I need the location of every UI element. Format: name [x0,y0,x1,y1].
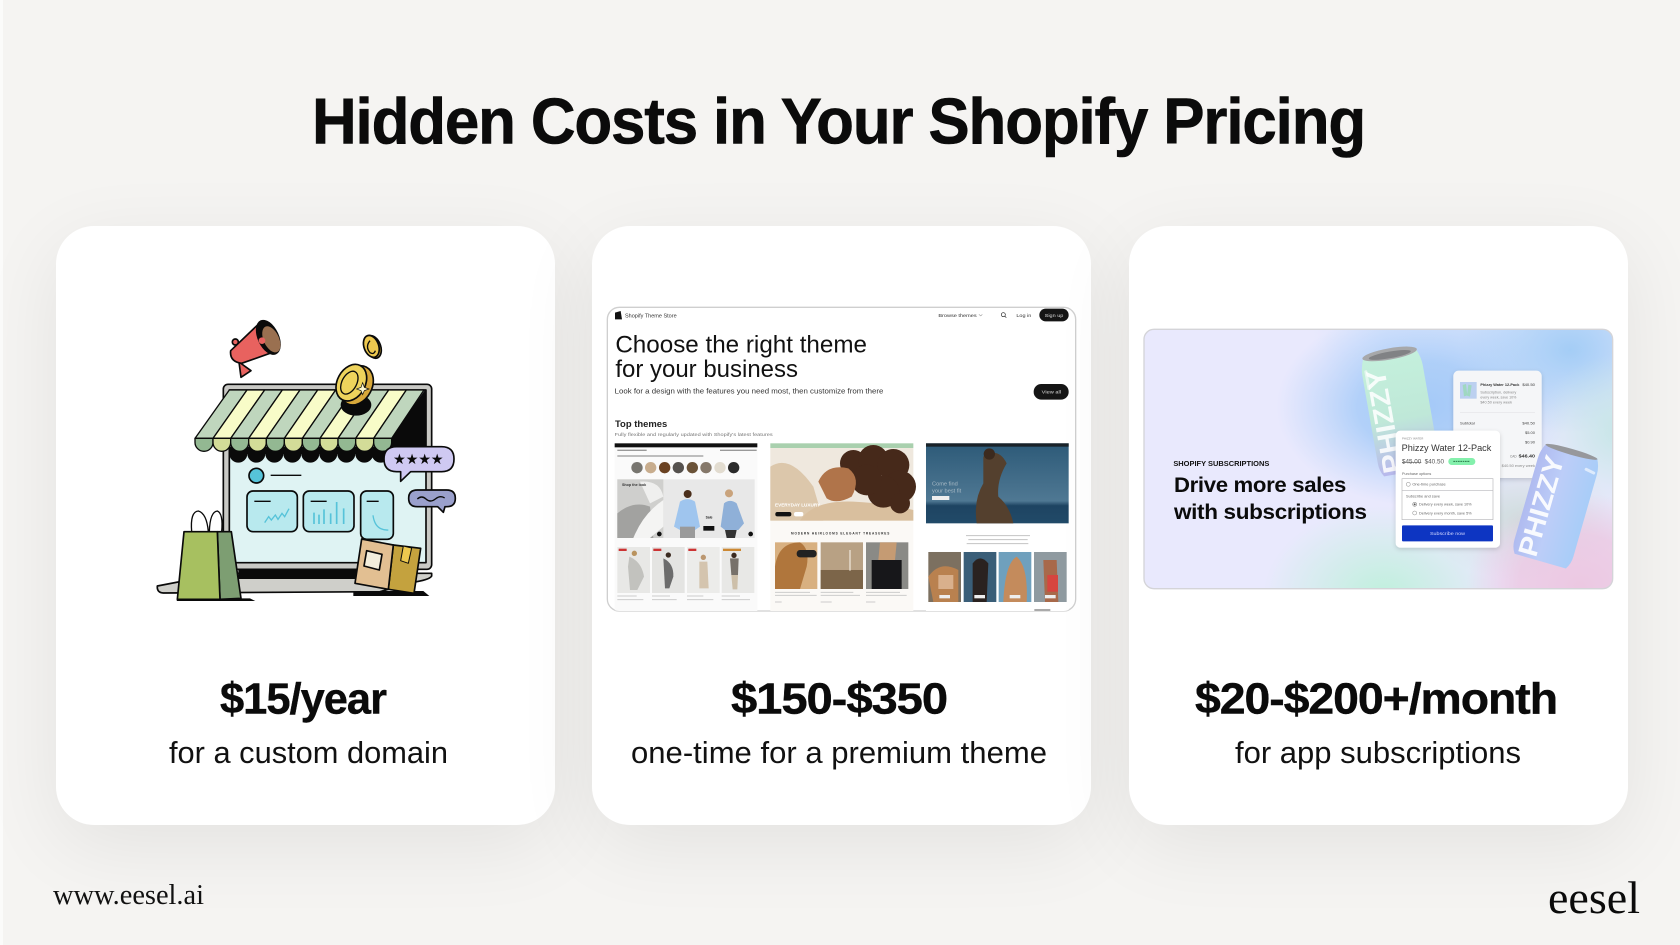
back checkout card: $5.00 [1525,431,1535,435]
back checkout card: $46.40 [1519,453,1535,458]
screenshot: Shopify theme store: Look for a design with the features you need most, then customize from there [615,386,883,395]
product card: Subscribe now [1430,531,1466,536]
back checkout card: Subtotal [1460,422,1475,426]
product card: Delivery every month, save 5% [1419,511,1472,515]
icon: storefront laptop illustration [157,316,455,601]
back checkout card: $40.50 [1522,422,1535,426]
screenshot: Shopify theme store: Fully flexible and regularly updated with Shopify's latest features [615,432,773,438]
green can [1356,343,1441,477]
megaphone [231,316,286,377]
theme thumbnail 2 [770,443,916,613]
screenshot: Shopify subscriptions banner [1143,328,1614,590]
theme thumbnail 1: Sale [706,516,713,520]
eesel logo: eesel [1548,872,1640,923]
theme thumbnail 3: Come find [932,481,958,487]
back checkout card: CAD [1510,454,1517,458]
theme thumbnail 2: MODERN HEIRLOOMS ELEGANT TREASURES [791,531,889,535]
nav bar: Log in [1016,313,1032,319]
back checkout card: $0.90 [1525,440,1535,444]
theme heading: Choose the right theme [615,332,867,358]
bag [177,511,255,601]
description: for app subscriptions [1235,736,1521,770]
product card: $40.50 [1425,460,1445,466]
product card: Phizzy Water 12-Pack [1402,443,1492,453]
product card: Purchase options [1402,472,1431,476]
price: $150-$350 [731,674,947,724]
green can: PHIZZY [1360,367,1408,476]
back checkout card: Subscription, delivery [1480,390,1517,394]
panel: premium theme cost [592,226,1091,825]
product card: Subscribe and save [1406,494,1440,498]
price: $15/year [220,674,387,724]
bubble: message [409,490,455,512]
title: Hidden Costs in Your Shopify Pricing [312,86,1365,158]
product card [1396,431,1500,548]
description: one-time for a premium theme [631,736,1047,770]
screenshot: Shopify theme store: Top themes [615,419,667,429]
blue can: PHIZZY [1512,452,1570,560]
bubble: stars [384,447,454,481]
panel: custom domain cost [56,226,555,825]
theme thumbnail 3 [926,443,1069,613]
coins [330,333,384,416]
back checkout card: Phizzy Water 12-Pack [1480,383,1520,387]
theme thumbnail 1 [615,443,757,613]
theme thumbnail 2: EVERYDAY LUXURY [775,502,821,507]
back checkout card: $40.50 every week [1480,400,1512,404]
back checkout card: every week, save 10% [1480,395,1516,399]
banner heading: Drive more sales [1174,472,1346,497]
nav bar: Shopify Theme Store [625,313,677,319]
banner heading: with subscriptions [1173,499,1367,524]
nav bar [615,309,1069,321]
description: for a custom domain [169,736,448,770]
product card: PHIZZY WATER [1402,436,1423,440]
product card: $45.00 [1402,460,1422,466]
blue can [1511,441,1602,570]
back checkout card: $40.50 every week [1502,464,1535,468]
nav bar: Browse themes [938,313,977,319]
back checkout card [1453,371,1542,478]
screenshot: Shopify theme store [607,307,1076,613]
product card: Delivery every week, save 10% [1419,503,1472,507]
theme thumbnail 1: Shop the look [622,483,647,487]
box [355,539,421,593]
banner heading [1173,472,1367,524]
banner eyebrow: SHOPIFY SUBSCRIPTIONS [1173,459,1269,468]
price: $20-$200+/month [1195,674,1557,724]
screenshot: Shopify theme store: for your business [615,357,798,383]
product card: One-time purchase [1412,483,1446,487]
nav bar: Sign up [1045,313,1064,319]
footer URL: www.eesel.ai [53,880,204,911]
back checkout card: $40.50 [1522,383,1535,387]
theme thumbnail 3: your best fit [932,488,962,494]
panel: app subscriptions cost [1129,226,1628,825]
bubble: stars: ★★★★ [393,452,444,468]
screenshot: Shopify theme store: View all [1042,390,1061,396]
